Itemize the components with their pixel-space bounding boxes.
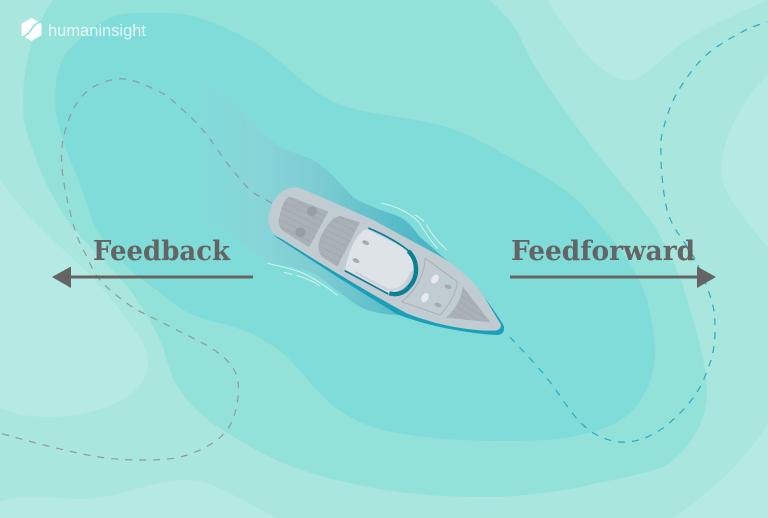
boat wake xyxy=(200,80,450,315)
hull shadow xyxy=(273,235,504,335)
arrow: feedback pointing left xyxy=(52,266,253,288)
bow deck xyxy=(446,287,490,322)
hull xyxy=(268,187,501,331)
cabin xyxy=(345,228,416,294)
foredeck panel xyxy=(402,258,457,315)
rear deck xyxy=(278,196,328,248)
dashed path: feedback (past course) xyxy=(0,79,272,460)
logo xyxy=(22,18,146,40)
middle deck xyxy=(318,216,360,266)
dashed path: feedforward (future course) xyxy=(510,22,767,442)
arrow: feedforward pointing right xyxy=(510,266,716,288)
wave lines around boat xyxy=(268,203,447,295)
label: Feedforward: Feedforward xyxy=(511,236,695,267)
label: Feedback: Feedback xyxy=(93,236,231,267)
boat xyxy=(268,187,504,340)
logo icon xyxy=(22,18,41,40)
logo wordmark: humaninsight xyxy=(48,21,146,40)
